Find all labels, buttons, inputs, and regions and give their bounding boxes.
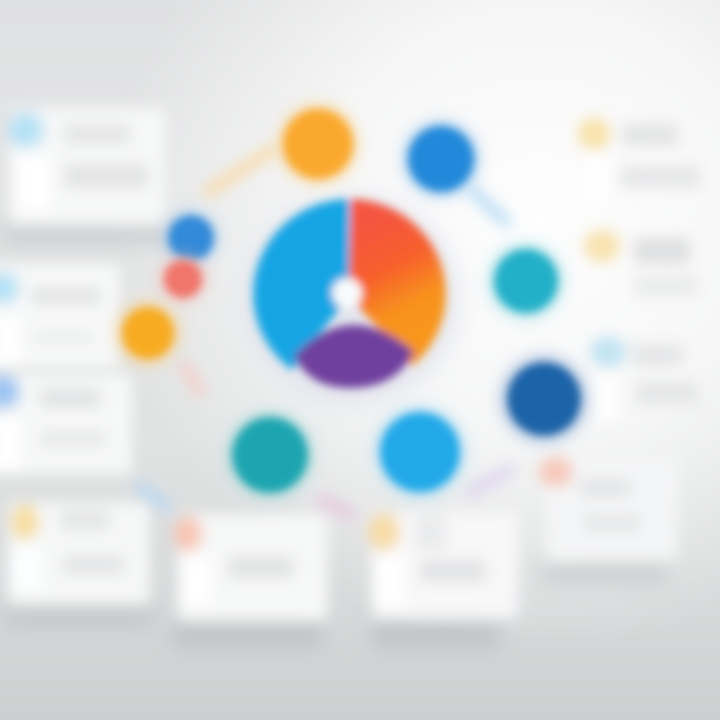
node: blue circle top right (401, 119, 481, 199)
panel: top left card (0, 108, 175, 246)
pie segment: purple (294, 325, 414, 388)
pie chart (242, 196, 458, 404)
pie centre (332, 278, 362, 308)
panel: bottom centre-right card (368, 512, 518, 648)
pie segment: red and orange (349, 199, 446, 366)
panel: bottom left card (4, 502, 154, 628)
node: orange circle top (276, 102, 360, 186)
pie shadow (242, 196, 458, 404)
panel: right column card 1 (578, 118, 700, 202)
node: small orange circle left (114, 299, 182, 367)
panel: lower left card (0, 374, 132, 474)
panel: right column card 3 (590, 337, 698, 420)
connector: blurred links (140, 150, 510, 514)
node: small blue circle left (161, 208, 221, 268)
node: navy circle lower right (498, 353, 590, 445)
pie segment: blue (253, 199, 349, 370)
node: small red circle left (157, 253, 209, 305)
node: teal circle right (486, 241, 566, 321)
panel: middle left card (0, 264, 120, 368)
node: sky blue circle bottom (372, 404, 468, 500)
panel: right column card 2 (584, 230, 698, 296)
panel: bottom centre-left card (172, 514, 328, 648)
node: teal circle bottom left (224, 409, 316, 501)
panel: bottom right card (539, 456, 678, 584)
